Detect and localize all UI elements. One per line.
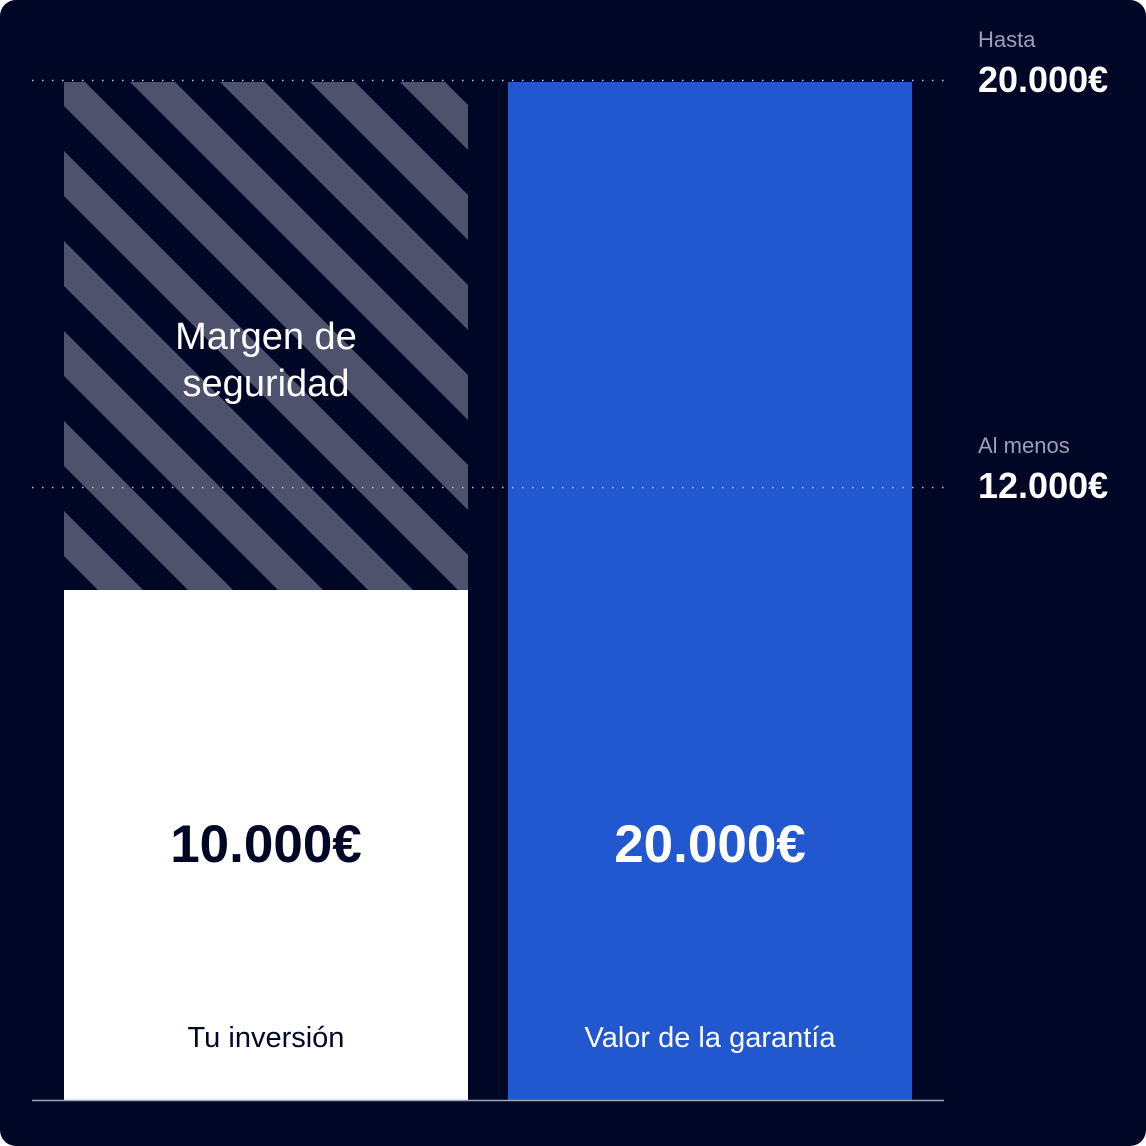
right label: al menos 12.000€: Al menos [978,433,1070,458]
right label: hasta 20.000€: Hasta [978,27,1035,52]
label: valor de la garantía: Valor de la garantía [585,1022,835,1054]
right label: hasta 20.000€ [978,27,1108,100]
white bar: investment [64,590,468,1100]
label: margen de seguridad: Margen de [175,316,357,358]
striped safety margin area [64,82,468,590]
right label: al menos 12.000€ [978,433,1108,506]
label: margen de seguridad [175,316,357,405]
value: 20.000€: 20.000€ [614,815,806,874]
right label: hasta 20.000€: 20.000€ [978,59,1108,100]
label: margen de seguridad: seguridad [183,363,349,405]
label: tu inversión: Tu inversión [188,1022,344,1054]
right label: al menos 12.000€: 12.000€ [978,465,1108,506]
blue bar: guarantee value [508,82,912,1100]
value: 10.000€: 10.000€ [170,815,362,874]
